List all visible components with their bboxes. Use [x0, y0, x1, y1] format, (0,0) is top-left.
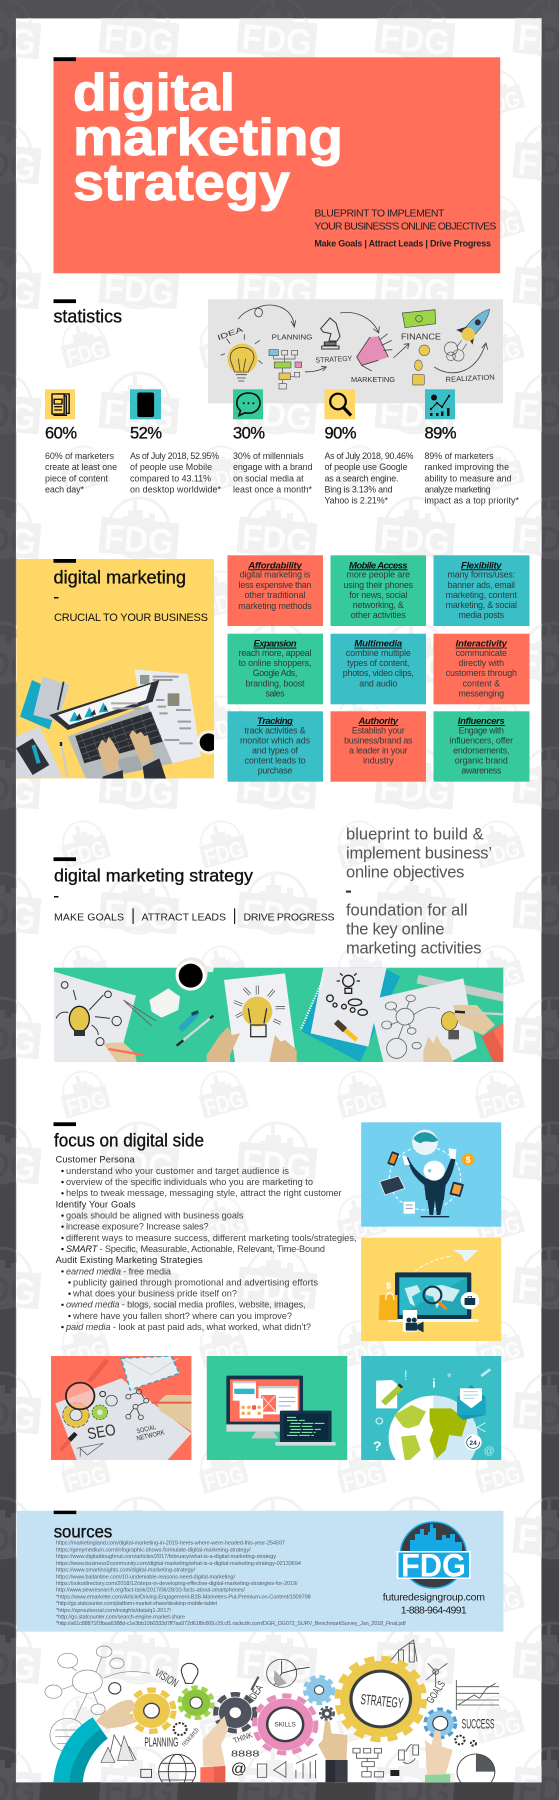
card body: for news, social [349, 590, 407, 600]
card body: directly with [458, 658, 504, 668]
illustration: businessman juggling devices [361, 1122, 501, 1227]
icon: coffee cup [176, 957, 214, 991]
card title: Flexibility [461, 560, 502, 571]
heading: statistics: statistics [54, 307, 122, 327]
heading [54, 566, 208, 624]
section: focus on digital side [54, 1122, 356, 1332]
card body: customers through [446, 668, 517, 678]
card body [239, 648, 311, 698]
description: 89% of marketers [424, 451, 494, 461]
card body [344, 725, 413, 766]
text block: blueprint and foundation: blueprint to build & [346, 825, 484, 843]
stat: 90% Google [324, 389, 414, 505]
card body [240, 725, 311, 776]
value: 52% [130, 424, 162, 442]
card body: Engage with [459, 725, 504, 735]
illustration: laptop world map and paper plane [361, 1238, 501, 1341]
illustration: idea to realization: REALIZATION [445, 372, 495, 384]
heading: focus on digital side [54, 1130, 204, 1151]
bullet list: SMART - Specific, Measurable, Actionable, Relevant, Time-Bound [66, 1244, 325, 1254]
text block: blueprint and foundation [346, 825, 492, 957]
gear: green [180, 1687, 212, 1718]
card title: Tracking [257, 716, 293, 727]
card body: reach more, appeal [239, 648, 311, 658]
description [45, 451, 117, 494]
description [424, 451, 520, 505]
icon: smartphone [130, 389, 161, 419]
bullet list: helps to tweak message, messaging style, attract the right customer [66, 1188, 342, 1198]
value: 90% [324, 424, 357, 442]
illustration: strategy gears and hands: GOALS [425, 1680, 448, 1706]
card: Expansion [228, 634, 323, 704]
heading: digital marketing [54, 566, 186, 587]
source links: https://www.business2community.com/digital-marketing/what-is-a-digital-marketing-strategy-02133694 [56, 1561, 301, 1567]
description: Yahoo is 2.21%* [324, 495, 389, 505]
bullet list: what does your business pride itself on? [72, 1289, 237, 1299]
logo: FDG [397, 1522, 471, 1588]
illustration: strategy gears and hands [45, 1640, 499, 1789]
card: Flexibility [434, 555, 530, 626]
description: Bing is 3.13% and [324, 484, 393, 494]
card body [238, 570, 312, 611]
card: Mobile Access [330, 555, 426, 626]
card body: monitor which ads [240, 736, 311, 746]
description: of people use Mobile [130, 462, 212, 472]
heading: digital marketing strategy: digital marketing strategy [54, 866, 253, 886]
gear: blue small [305, 1677, 333, 1703]
subtitle: Make Goals | Attract Leads | Drive Progress [314, 239, 491, 249]
description: ability to measure and [424, 473, 512, 483]
text block: blueprint and foundation: the key online [346, 920, 444, 938]
card body: influencers, offer [450, 736, 513, 746]
illustration: idea to realization [208, 299, 503, 403]
card title: Influencers [458, 716, 505, 727]
gear: blue success [425, 1709, 455, 1737]
bullet list [56, 1155, 356, 1332]
card body [446, 570, 517, 620]
description: each day* [45, 484, 85, 494]
title: marketing [73, 109, 343, 167]
description: on desktop worldwide* [130, 484, 222, 494]
illustration: globe with communication icons: 24 [470, 1440, 477, 1447]
card body: purchase [258, 766, 292, 776]
panel: digital marketing crucial [16, 559, 221, 779]
illustration: strategy gears and hands: IDEA [247, 1683, 266, 1703]
card body [343, 648, 414, 688]
title: strategy [73, 154, 290, 212]
card body: marketing, content [446, 590, 517, 600]
illustration: strategy gears and hands: VISION [152, 1667, 181, 1690]
description [130, 451, 222, 494]
card body [344, 570, 414, 620]
card body: types of content, [347, 658, 409, 668]
value: 30% [233, 424, 265, 442]
goals row [54, 908, 334, 924]
gear: dark small [320, 1707, 334, 1720]
goals row: DRIVE PROGRESS [244, 912, 334, 924]
contact details: futuredesigngroup.com [383, 1592, 485, 1604]
card title: Interactivity [456, 639, 508, 650]
card body: branding, boost [246, 678, 305, 688]
card body: industry [363, 756, 394, 766]
illustration: laptop world map and paper plane: $ [386, 1281, 391, 1290]
card body: Establish your [352, 725, 405, 735]
card body: using their phones [344, 580, 414, 590]
card body: media posts [458, 610, 505, 620]
bullet list: Audit Existing Marketing Strategies [56, 1255, 203, 1265]
card body: sales [266, 688, 285, 698]
gear: large strategy: STRATEGY [360, 1692, 404, 1712]
card: Affordability [228, 555, 323, 626]
card body: endorsements, [453, 746, 509, 756]
source links: http://www.pewresearch.org/fact-tank/2017/06/28/10-facts-about-smartphones/ [56, 1588, 245, 1594]
description: create at least one [45, 462, 117, 472]
card body: organic brand [455, 756, 508, 766]
description: ranked improving the [424, 462, 509, 472]
card: Multimedia [330, 634, 426, 704]
bullet list: Identify Your Goals [56, 1199, 136, 1209]
description: As of July 2018, 52.95% [130, 451, 219, 461]
illustration: strategy gears and hands: research [179, 1726, 201, 1748]
card body: other activities [351, 610, 406, 620]
card: Interactivity [434, 634, 530, 704]
card body: track activities & [244, 725, 306, 735]
illustration: businessman juggling devices: $ [466, 1155, 471, 1165]
source links: https://www.smartinsights.com/digital-marketing-strategy/ [56, 1568, 195, 1574]
source links: *https://www.emarketer.com/Article/Driving-Engagement-B2B-Marketers-Put-Premium-on-Content/1009798 [56, 1594, 311, 1600]
text block: blueprint and foundation: online objectives [346, 863, 464, 881]
illustration: monitor and laptop web design [207, 1356, 347, 1460]
description: on social media at [233, 473, 304, 483]
card body: communicate [456, 648, 507, 658]
illustration: SEO and social network: SOCIAL [136, 1424, 157, 1435]
card body: marketing methods [238, 601, 312, 611]
gear: dark grey [216, 1694, 255, 1731]
goals row: ATTRACT LEADS [142, 912, 226, 924]
bullet list: increase exposure? Increase sales? [66, 1222, 209, 1232]
value: 60% [45, 424, 77, 442]
illustration: SEO and social network: NETWORK [136, 1429, 166, 1443]
stat: 89% measure impact [424, 389, 520, 505]
title: digital [73, 64, 235, 122]
card body: combine multiple [346, 648, 411, 658]
icon: analytics chart [425, 389, 455, 419]
arm: teal sleeve with hand [53, 1700, 137, 1782]
description: of people use Google [324, 462, 408, 472]
description: least once a month* [233, 484, 313, 494]
gear: large strategy [337, 1658, 424, 1740]
card body: awareness [461, 766, 502, 776]
card body [446, 648, 517, 698]
title [73, 64, 343, 212]
source links: *http://a61c88871f1fbaa6388d-c1e3bb10b0333d7ff7aa972d61f8c669.r29.cf1.rackcdn.com/DGR_DG072_SURV_BenchmarkSurvey_Jan_2018_Final.pdf [56, 1621, 406, 1627]
card: Tracking [228, 711, 323, 782]
illustration: idea to realization: PLANNING [272, 333, 313, 342]
illustration: globe with communication icons: i [432, 1377, 436, 1390]
illustration: strategy gears and hands: SUCCESS [462, 1717, 494, 1732]
illustration: idea to realization: FINANCE [401, 332, 441, 342]
source links: *http://gs.statcounter.com/search-engine-market-share [56, 1614, 185, 1620]
card title: Mobile Access [349, 560, 408, 571]
bullet list: earned media - free media [66, 1266, 172, 1276]
description: as a search engine. [324, 473, 398, 483]
card title: Multimedia [354, 639, 402, 650]
description: compared to 43.11% [130, 473, 211, 483]
bullet list: publicity gained through promotional and advertising efforts [73, 1277, 318, 1287]
illustration: laptop on desk [16, 669, 221, 779]
card: Authority [330, 711, 426, 782]
bullet list: Customer Persona [56, 1155, 135, 1165]
card body: photos, video clips, [343, 668, 414, 678]
description: piece of content [45, 473, 109, 483]
bullet list: owned media - blogs, social media profiles, website, images, [66, 1300, 306, 1310]
goals row: MAKE GOALS [54, 912, 124, 924]
description: 60% of marketers [45, 451, 115, 461]
heading: sources [54, 1521, 113, 1541]
card title: Authority [358, 716, 399, 727]
value: 89% [424, 424, 457, 442]
illustration: idea to realization: MARKETING [351, 375, 395, 384]
illustration: globe with communication icons: ? [373, 1439, 382, 1454]
bullet list: different ways to measure success, different marketing tools/strategies, [66, 1233, 356, 1243]
contact details: 1-888-964-4991 [401, 1604, 467, 1616]
card body: many forms/uses: [447, 570, 515, 580]
heading: CRUCIAL TO YOUR BUSINESS [54, 612, 208, 624]
card body: other traditional [244, 590, 306, 600]
stat: 52% mobile [130, 389, 222, 494]
arm: green cuff with hand [425, 1730, 453, 1782]
gear: pink skills: SKILLS [275, 1722, 296, 1729]
icon: documents [45, 389, 75, 419]
panel: sources [17, 1511, 503, 1632]
subtitle: YOUR BUSINESS'S ONLINE OBJECTIVES [314, 220, 496, 232]
card body: marketing, & social [446, 600, 517, 610]
card title: Expansion [254, 639, 297, 650]
card body: content & [463, 678, 500, 688]
card body: banner ads, email [448, 580, 515, 590]
card title: Affordability [247, 560, 302, 571]
card body: content leads to [244, 756, 306, 766]
text block: blueprint and foundation: implement business’ [346, 844, 492, 862]
illustration: SEO and social network [51, 1356, 191, 1460]
illustration: idea to realization: STRATEGY [315, 354, 352, 365]
source links: https://genymedium.com/infographic-shows-formulate-digital-marketing-strategy/ [56, 1547, 251, 1553]
source links: *http://gs.statcounter.com/platform-market-share/desktop-mobile-tablet [56, 1601, 217, 1607]
illustration: globe with communication icons: @ [484, 1446, 495, 1457]
card body: to online shoppers, [239, 658, 311, 668]
card body: and audio [359, 678, 397, 688]
description: analyze marketing [424, 484, 491, 494]
panel: hero title [54, 57, 500, 273]
bullet list: paid media - look at past paid ads, what worked, what didn’t? [65, 1322, 311, 1332]
card body: more people are [347, 570, 410, 580]
illustration: strategy gears and hands: @ [231, 1761, 247, 1777]
source links: https://www.ballantine.com/10-undeniable-reasons-need-digital-marketing/ [56, 1574, 235, 1580]
heading: digital marketing strategy [54, 857, 334, 924]
icon: magnifying glass [324, 389, 355, 419]
bullet list: goals should be aligned with business goals [66, 1210, 244, 1220]
subtitle: BLUEPRINT TO IMPLEMENT [314, 208, 445, 220]
card body: less expensive than [239, 580, 311, 590]
text block: blueprint and foundation: foundation for all [346, 901, 468, 919]
illustration: strategy gears and hands: PLANNING [144, 1735, 178, 1750]
source links [56, 1541, 406, 1627]
card body: Google Ads, [253, 668, 297, 678]
card body: messenging [458, 688, 504, 698]
stat: 60% of marketers [45, 389, 117, 494]
source links: https://sokodirectory.com/2018/12/steps-in-developing-effective-digital-marketing-strategies-for-2019/ [56, 1581, 298, 1587]
card body: networking, & [353, 600, 404, 610]
stat: 30% millennials [233, 389, 313, 494]
illustration: globe with communication icons: * [447, 1371, 452, 1385]
text block: blueprint and foundation: marketing activities [346, 939, 482, 957]
illustration: globe with communication icons [361, 1356, 502, 1460]
arm: dark cuff with hand [318, 1720, 348, 1782]
description [324, 451, 414, 505]
illustration: strategy gears and hands: 8888 [231, 1749, 260, 1759]
gear: pink skills [255, 1696, 316, 1753]
illustration: globe with communication icons: ! [404, 1368, 408, 1384]
subtitle [314, 208, 496, 249]
illustration: ideas on green desk [54, 957, 503, 1062]
illustration: idea to realization: IDEA [216, 325, 244, 342]
source links: https://marketingland.com/digital-marketing-in-2019-heres-where-were-headed-this-year-254597 [56, 1541, 285, 1547]
description: engage with a brand [233, 462, 313, 472]
gear: yellow left [129, 1690, 174, 1731]
illustration: SEO and social network: SEO [86, 1420, 117, 1443]
description: As of July 2018, 90.46% [324, 451, 414, 461]
description [233, 451, 313, 494]
source links: *https://sproutsocial.com/insights/data/q1-2017/ [56, 1608, 171, 1614]
card body: a leader in your [349, 746, 408, 756]
source links: https://www.digitaldoughnut.com/articles/2017/february/what-is-a-digital-marketing-strategy [56, 1554, 276, 1560]
bullet list: overview of the specific individuals who you are marketing to [66, 1177, 313, 1187]
contact details [383, 1592, 485, 1616]
icon: speech bubble [233, 389, 263, 419]
bullet list: where have you fallen short? where can you improve? [72, 1311, 292, 1321]
bullet list: understand who your customer and target audience is [66, 1166, 289, 1176]
card body: digital marketing is [240, 570, 311, 580]
card body: business/brand as [344, 736, 413, 746]
description: 30% of millennials [233, 451, 304, 461]
illustration: strategy gears and hands: THINK [232, 1731, 254, 1745]
card body [450, 725, 513, 776]
card: Influencers [434, 711, 530, 782]
card body: and types of [252, 746, 299, 756]
arm: coral cuff with hand [200, 1716, 228, 1782]
description: impact as a top priority* [424, 495, 520, 505]
logo: FDG: FDG [401, 1548, 466, 1584]
